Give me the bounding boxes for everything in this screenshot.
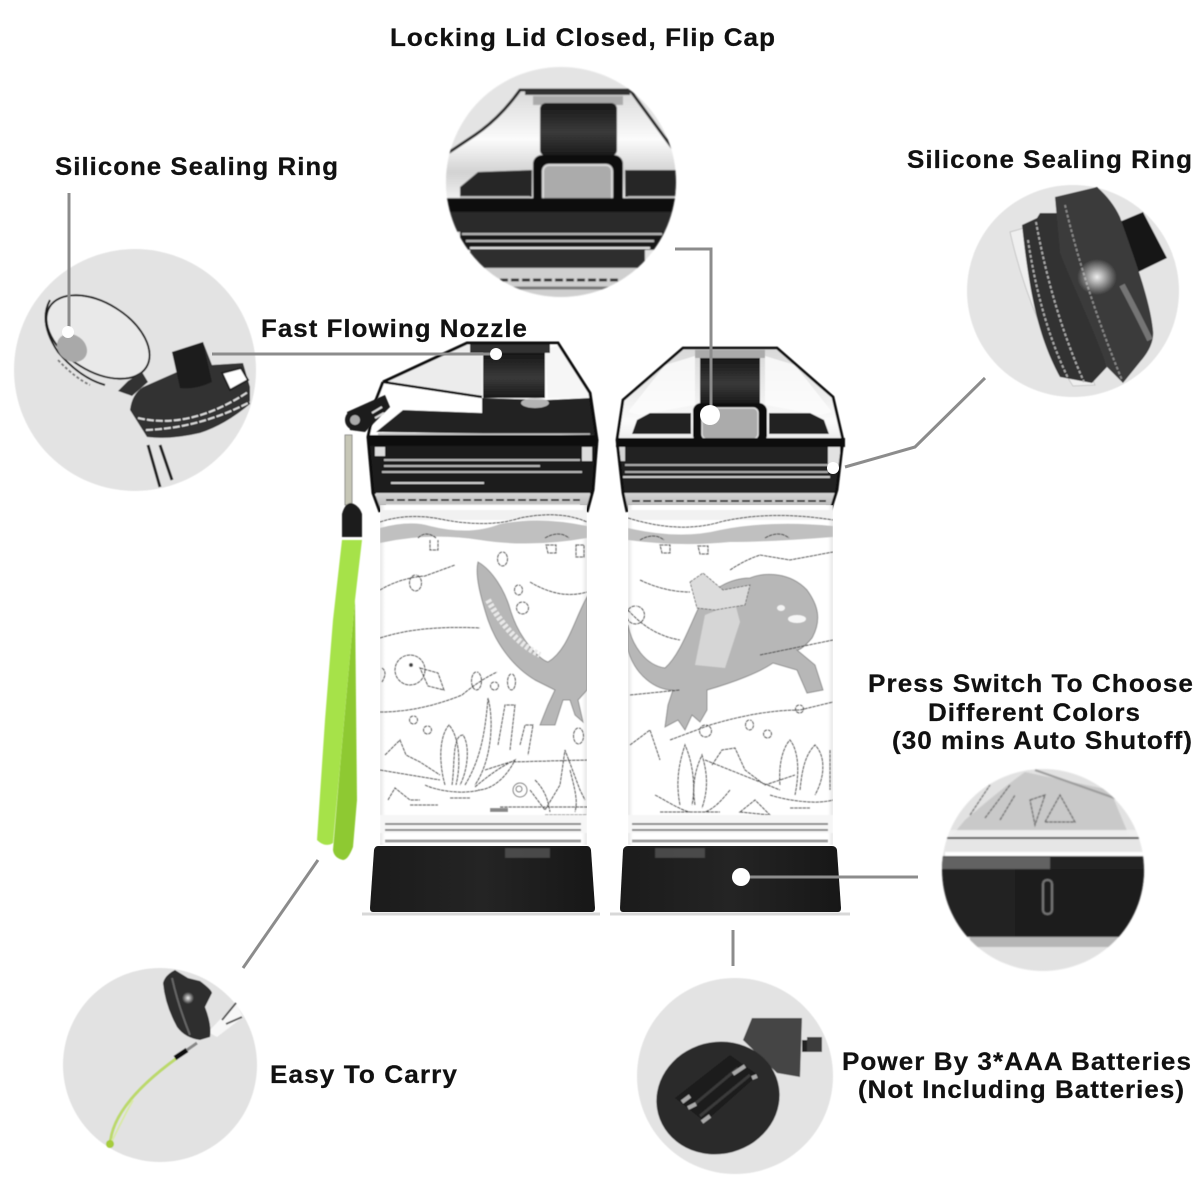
connector: right sealing ring	[827, 378, 985, 474]
heading: silicone sealing ring left: Silicone Sealing Ring	[55, 153, 339, 181]
base	[610, 846, 850, 914]
connector: locking lid	[675, 249, 720, 425]
base	[362, 846, 600, 914]
detail circle: thread seal lid	[967, 185, 1179, 397]
heading: locking lid closed: Locking Lid Closed, Flip Cap	[390, 24, 776, 52]
connector: switch	[732, 868, 918, 886]
text block: batteries: Power By 3*AAA Batteries	[842, 1048, 1192, 1076]
lid with flip cap	[118, 342, 250, 487]
heading: silicone sealing ring right: Silicone Sealing Ring	[907, 146, 1193, 174]
heading: fast flowing nozzle: Fast Flowing Nozzle	[261, 315, 528, 343]
bottle: right, lid closed	[610, 348, 850, 914]
text block: press switch: Press Switch To Choose	[868, 670, 1194, 698]
heading: easy to carry: Easy To Carry	[270, 1061, 458, 1089]
detail circle: flip cap closed	[440, 67, 680, 300]
clear body with printed art	[380, 505, 590, 845]
connector: batteries	[732, 930, 734, 966]
text block: batteries: (Not Including Batteries)	[858, 1076, 1185, 1104]
text block: press switch	[868, 670, 1194, 755]
text block: press switch: (30 mins Auto Shutoff)	[892, 727, 1193, 755]
lid dome	[365, 343, 600, 513]
wrist strap	[317, 435, 362, 860]
sealing ring outline	[32, 278, 164, 396]
connector: sealing ring	[62, 193, 74, 338]
hinge	[345, 395, 390, 432]
detail circle: easy to carry strap	[63, 968, 257, 1162]
text block: batteries	[842, 1048, 1192, 1104]
bottle: left, lid open	[345, 343, 600, 914]
fish	[382, 655, 444, 690]
lid dome	[612, 348, 849, 513]
detail circle: battery compartment	[637, 978, 833, 1174]
text block: press switch: Different Colors	[928, 699, 1141, 727]
dragon silhouette right	[628, 574, 823, 730]
detail circle: silicone ring open lid	[14, 249, 256, 491]
clear body with printed art	[627, 505, 833, 845]
detail circle: switch on base	[940, 769, 1150, 971]
connector: nozzle	[212, 348, 502, 360]
seaweed and ground	[380, 698, 590, 815]
dragon silhouette left	[477, 562, 587, 725]
connector: strap	[243, 860, 318, 968]
